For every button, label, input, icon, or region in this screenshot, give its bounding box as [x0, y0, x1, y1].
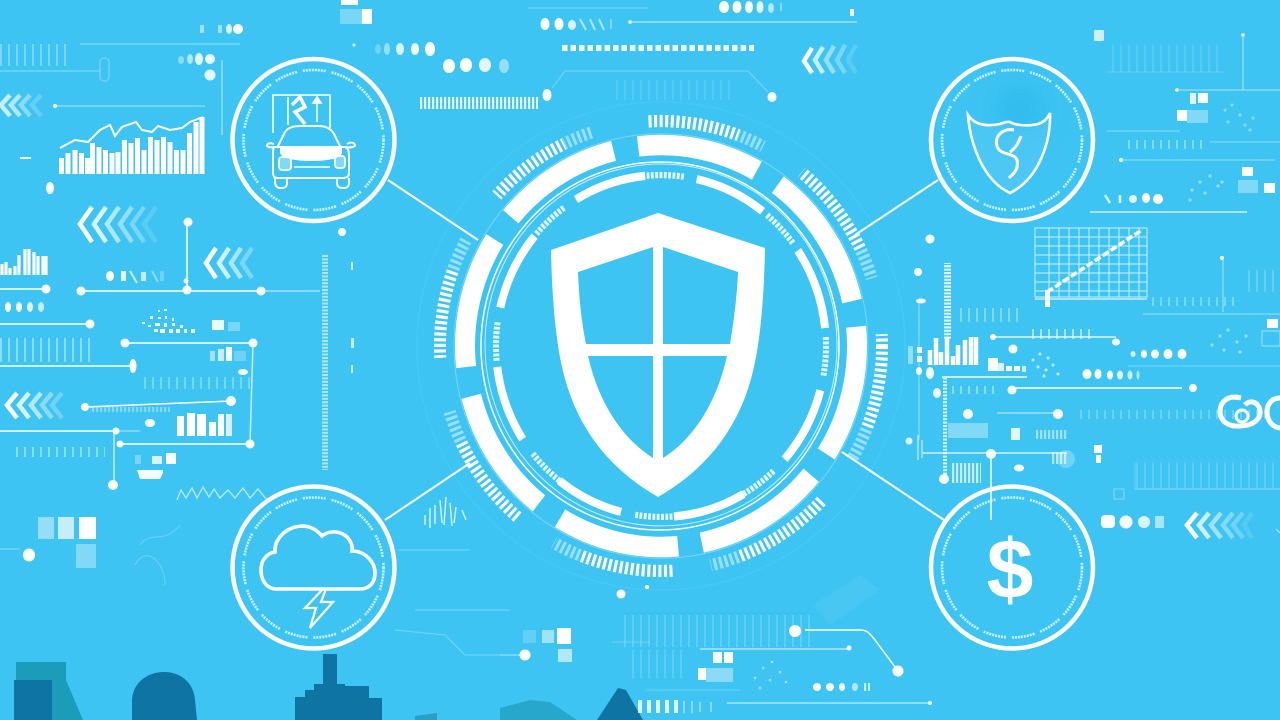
connector lines	[385, 180, 944, 520]
badge: dollar	[931, 486, 1093, 648]
icon: small shield	[968, 113, 1050, 193]
left circuit lines and nodes	[0, 218, 320, 490]
top-left dots	[178, 24, 243, 80]
outer tick marks	[440, 121, 882, 571]
icon: road sign	[273, 95, 330, 133]
small faint circuit lines under main ring	[395, 550, 520, 655]
waveform near lower-left badge	[425, 497, 466, 528]
bottom-left squares	[0, 517, 180, 585]
right circuit cluster	[906, 234, 1280, 520]
right ring glyphs	[1220, 397, 1280, 428]
icon: car	[267, 126, 355, 188]
thin inner rings	[481, 162, 839, 530]
icon: cloud	[261, 526, 375, 589]
top-left faint lines	[0, 44, 240, 194]
badge: storm	[232, 486, 394, 648]
top center dotted row	[562, 45, 754, 51]
faint background glows	[417, 82, 1046, 625]
bottom right dots	[1101, 462, 1280, 533]
badge: vehicle	[232, 59, 394, 221]
top center dots and stripes	[340, 0, 857, 109]
top right panel	[1090, 30, 1280, 212]
tiny label dashes	[428, 104, 894, 588]
bottom center circuit	[500, 585, 932, 713]
thick outer segments	[385, 63, 937, 629]
icon: squiggle dollar	[996, 130, 1021, 178]
left bar charts and clusters	[0, 249, 267, 500]
icon: lightning bolt	[305, 589, 333, 628]
skyline silhouette	[14, 654, 643, 720]
top-left area chart	[60, 117, 203, 174]
icon: dollar sign: $	[987, 522, 1033, 616]
central shield	[551, 213, 765, 497]
inner dashes	[432, 109, 890, 583]
central ring dial	[434, 114, 888, 578]
badge: shield with money sign	[931, 59, 1093, 221]
vertical dashed column	[322, 228, 354, 470]
chevrons	[1, 45, 1252, 538]
line chart with grid	[1035, 228, 1240, 307]
